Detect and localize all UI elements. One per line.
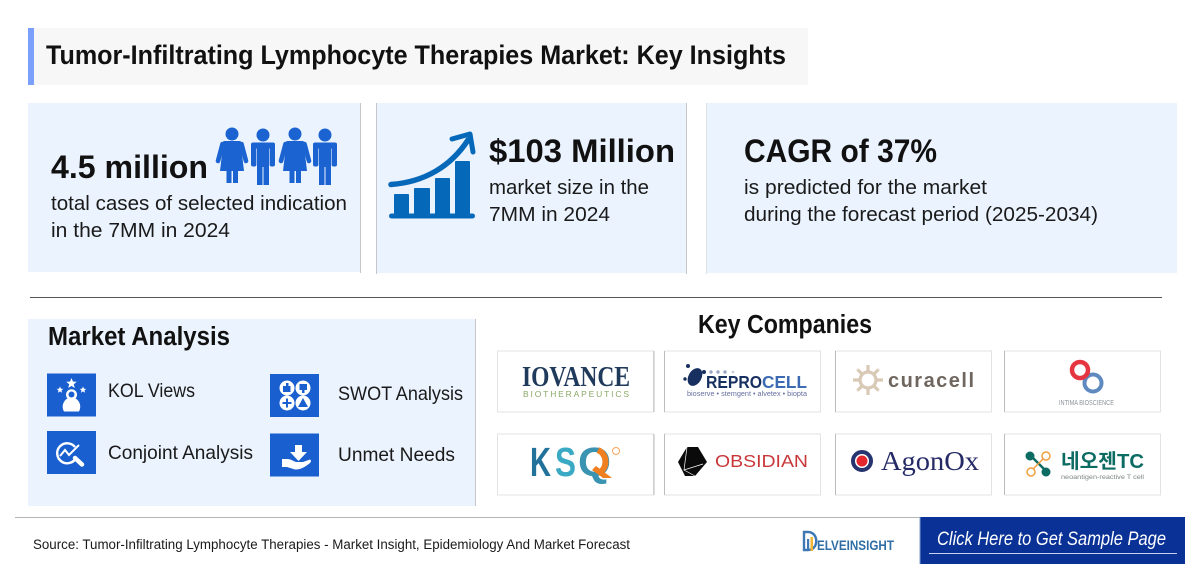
icon: growth chart xyxy=(389,134,475,218)
text: market size description: 7MM in 2024 xyxy=(489,203,610,226)
logo: Reprocell: CELL xyxy=(762,372,807,392)
text: cases description xyxy=(51,192,347,242)
text: cases description: total cases of selected indication xyxy=(51,192,347,215)
panel: market size xyxy=(376,103,687,274)
logo: AgonOx xyxy=(836,434,992,495)
title banner xyxy=(28,28,808,85)
text: market size description xyxy=(489,176,649,226)
logo: DelveInsight: ELVEINSIGHT xyxy=(817,538,895,553)
source note: Source: Tumor-Infiltrating Lymphocyte Therapies - Market Insight, Epidemiology And Market Forecast xyxy=(33,537,630,552)
logo: KSQ: K xyxy=(530,439,551,485)
panel: total cases xyxy=(28,103,361,273)
logo: Intima Bioscience: INTIMA BIOSCIENCE xyxy=(1059,398,1114,407)
logo: DelveInsight xyxy=(803,532,895,553)
icon: SWOT analysis xyxy=(270,374,319,417)
logo: Obsidian xyxy=(664,434,820,495)
text: CAGR description: is predicted for the market xyxy=(744,176,987,199)
icon: conjoint analysis xyxy=(47,431,96,474)
button: sample page xyxy=(920,517,1185,564)
stat: market value: $103 Million xyxy=(489,133,675,169)
logo: Neoantigen TC: 네오젠TC xyxy=(1061,450,1144,473)
footer xyxy=(15,517,1185,564)
logo: Reprocell xyxy=(664,351,820,412)
text: market size description: market size in the xyxy=(489,176,649,199)
heading: key companies: Key Companies xyxy=(698,311,872,339)
label: SWOT analysis: SWOT Analysis xyxy=(338,383,463,405)
logo: KSQ: S xyxy=(555,439,576,485)
button: sample page: Click Here to Get Sample Page xyxy=(937,529,1166,550)
section: key companies xyxy=(498,311,1160,495)
logo: Neoantigen TC xyxy=(1004,434,1160,495)
label: conjoint analysis: Conjoint Analysis xyxy=(108,442,253,464)
logo: KSQ xyxy=(498,434,654,495)
icon: people xyxy=(218,128,337,185)
panel: CAGR xyxy=(706,103,1177,274)
stat: 4.5 million: 4.5 million xyxy=(51,149,208,185)
text: cases description: in the 7MM in 2024 xyxy=(51,219,230,242)
logo: AgonOx: AgonOx xyxy=(881,446,980,476)
label: KOL views: KOL Views xyxy=(108,380,195,402)
heading: market analysis: Market Analysis xyxy=(48,323,230,351)
title banner: Tumor-Infiltrating Lymphocyte Therapies Market: Key Insights xyxy=(46,40,786,70)
logo: Curacell: curacell xyxy=(888,370,974,392)
label: unmet needs: Unmet Needs xyxy=(338,444,455,466)
logo: KSQ: Q xyxy=(578,439,611,485)
logo: Neoantigen TC: neoantigen-reactive T cell xyxy=(1061,474,1145,481)
logo: Iovance xyxy=(498,351,654,412)
text: CAGR description xyxy=(744,176,1098,226)
logo: Reprocell: bioserve • stemgent • alvetex • biopta xyxy=(687,391,807,398)
logo: Reprocell: REPRO xyxy=(706,372,762,392)
logo: Intima Bioscience xyxy=(1004,351,1160,412)
logo: Curacell xyxy=(836,351,992,412)
logo: Obsidian: OBSIDIAN xyxy=(715,451,808,471)
text: CAGR description: during the forecast period (2025-2034) xyxy=(744,203,1098,226)
icon: unmet needs xyxy=(270,434,319,476)
panel: market analysis xyxy=(28,319,476,506)
logo: Iovance: IOVANCE xyxy=(522,362,630,393)
stat: CAGR: CAGR of 37% xyxy=(744,133,937,169)
icon: KOL views xyxy=(47,374,96,416)
logo: Iovance: BIOTHERAPEUTICS xyxy=(523,389,629,399)
